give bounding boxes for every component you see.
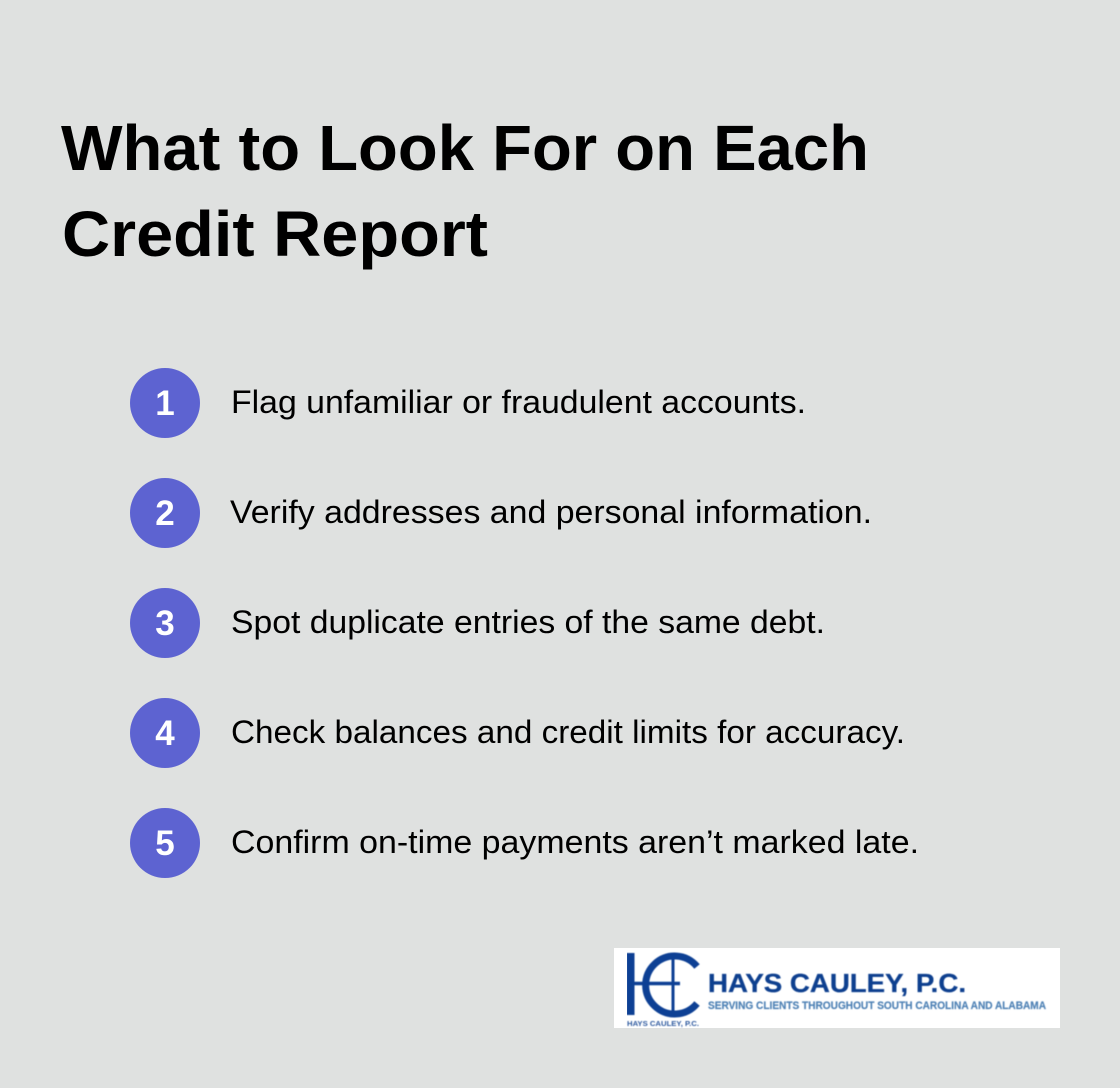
list item 1 bbox=[130, 368, 806, 438]
list item 3: 3 bbox=[155, 604, 175, 643]
list item 3 bbox=[130, 588, 825, 658]
logo name: HAYS CAULEY, P.C. bbox=[708, 968, 966, 998]
list item 5: Confirm on-time payments aren’t marked late. bbox=[231, 824, 919, 860]
list item 3: Spot duplicate entries of the same debt. bbox=[231, 604, 825, 640]
list item 4: Check balances and credit limits for accuracy. bbox=[231, 714, 905, 750]
logo: Hays Cauley, P.C. bbox=[614, 948, 1060, 1028]
list item 5: 5 bbox=[155, 824, 175, 863]
title: What to Look For on Each bbox=[61, 112, 869, 184]
list item 2: 2 bbox=[155, 494, 175, 533]
list item 5 bbox=[130, 808, 919, 878]
title: Credit Report bbox=[62, 198, 488, 270]
icon: HC monogram bbox=[630, 953, 697, 1017]
list item 2: Verify addresses and personal information. bbox=[230, 494, 872, 530]
list item 2 bbox=[130, 478, 872, 548]
list item 4: 4 bbox=[155, 714, 175, 753]
list item 4 bbox=[130, 698, 905, 768]
logo tagline: SERVING CLIENTS THROUGHOUT SOUTH CAROLINA AND ALABAMA bbox=[708, 1000, 1046, 1012]
title bbox=[61, 112, 869, 270]
list item 1: Flag unfamiliar or fraudulent accounts. bbox=[231, 384, 806, 420]
logo small caption: HAYS CAULEY, P.C. bbox=[627, 1019, 699, 1028]
list item 1: 1 bbox=[155, 384, 175, 423]
